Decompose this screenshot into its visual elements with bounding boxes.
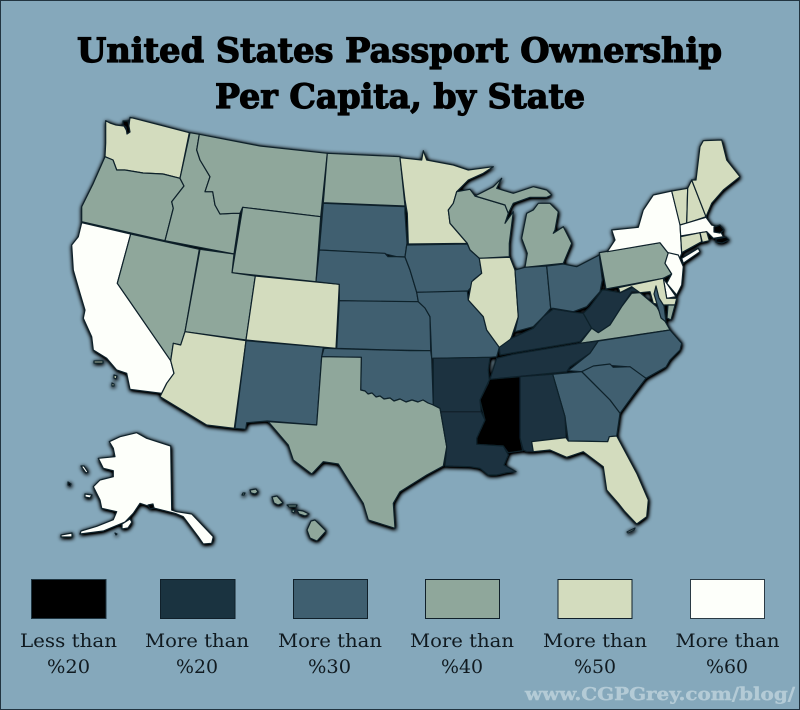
legend item: more than 60%: More than xyxy=(676,630,780,652)
state: Vermont xyxy=(672,188,688,225)
state: Washington xyxy=(105,117,189,178)
title: United States Passport Ownership xyxy=(77,31,722,71)
state: North Carolina xyxy=(568,330,682,378)
legend item: less than 20%: Less than xyxy=(20,630,117,652)
map of US states xyxy=(61,117,740,544)
state: West Virginia xyxy=(583,287,640,333)
legend item: less than 20% xyxy=(20,580,117,678)
state: Indiana xyxy=(515,266,551,332)
state: New Jersey xyxy=(665,253,683,295)
state: Alabama xyxy=(520,374,566,452)
state: Nebraska xyxy=(316,250,418,302)
state: Virginia xyxy=(580,293,670,343)
website credit: www.CGPGrey.com/blog/ xyxy=(524,684,795,705)
legend xyxy=(20,580,780,678)
legend item: more than 30%: %30 xyxy=(308,656,351,678)
state: Michigan lower peninsula xyxy=(522,203,572,267)
state: Idaho xyxy=(165,133,240,254)
state: Louisiana xyxy=(441,412,516,475)
legend item: more than 20% xyxy=(145,580,249,678)
state: Missouri xyxy=(417,291,499,358)
state: Kentucky xyxy=(499,309,592,355)
state: Ohio xyxy=(547,255,602,312)
legend item: more than 40% xyxy=(410,580,514,678)
icon: Chesapeake Bay xyxy=(654,286,666,322)
state: Nevada xyxy=(117,234,199,361)
state: Massachusetts xyxy=(680,217,723,238)
icon: Channel Islands xyxy=(94,361,117,386)
state: Colorado xyxy=(246,276,339,348)
state: South Dakota xyxy=(319,203,407,257)
legend item: more than 50%: %50 xyxy=(574,656,616,678)
state: Arkansas xyxy=(433,357,490,412)
state: New Hampshire xyxy=(687,180,706,223)
state: Florida xyxy=(532,436,648,524)
state: Pennsylvania xyxy=(599,243,672,289)
state: Texas xyxy=(268,357,447,528)
title: Per Capita, by State xyxy=(215,77,585,117)
state: New Mexico xyxy=(235,341,323,429)
legend item: more than 60% xyxy=(676,580,780,678)
state: Virginia eastern shore xyxy=(667,305,675,320)
state: Oregon xyxy=(82,157,184,241)
state: Long Island xyxy=(682,248,700,263)
icon: Massachusetts dark islands xyxy=(714,225,729,243)
legend item: more than 50%: More than xyxy=(543,630,647,652)
state: Maryland xyxy=(618,278,677,305)
legend item: more than 50% xyxy=(543,580,647,678)
title xyxy=(77,31,722,117)
state: Georgia xyxy=(553,372,620,442)
state: Minnesota xyxy=(400,151,493,244)
icon: Alaska dark bay and islets xyxy=(68,482,154,535)
state: South Carolina xyxy=(582,364,646,413)
state: North Dakota xyxy=(323,153,405,206)
state: Oklahoma xyxy=(322,348,433,405)
legend item: more than 40%: More than xyxy=(410,630,514,652)
state: Wisconsin xyxy=(448,189,513,258)
icon: Alaska islands xyxy=(61,466,132,537)
state: Wyoming xyxy=(232,207,321,282)
state: Arizona xyxy=(160,332,246,428)
state: Connecticut xyxy=(681,233,702,253)
state: Hawaii xyxy=(242,489,326,541)
state: Montana xyxy=(197,134,327,217)
state: Iowa xyxy=(405,244,482,292)
state: New York xyxy=(607,191,682,262)
state: Utah xyxy=(185,249,255,340)
state: Alaska xyxy=(80,433,213,544)
state: Delaware xyxy=(663,278,676,298)
legend item: more than 30% xyxy=(278,580,382,678)
state: Illinois xyxy=(468,257,518,347)
state: Kansas xyxy=(337,301,431,351)
state: Tennessee xyxy=(490,341,598,379)
legend item: less than 20%: %20 xyxy=(47,656,90,678)
legend item: more than 20%: More than xyxy=(145,630,249,652)
state: California xyxy=(72,223,174,393)
state: Rhode Island xyxy=(700,232,709,242)
state: Mississippi xyxy=(477,377,523,453)
legend item: more than 30%: More than xyxy=(278,630,382,652)
icon: Florida Keys xyxy=(627,528,635,533)
state: Maine xyxy=(692,140,740,217)
legend item: more than 40%: %40 xyxy=(441,656,483,678)
legend item: more than 20%: %20 xyxy=(176,656,218,678)
state: Michigan upper peninsula xyxy=(475,178,552,213)
icon: Puget Sound islands xyxy=(123,121,130,134)
legend item: more than 60%: %60 xyxy=(706,656,748,678)
